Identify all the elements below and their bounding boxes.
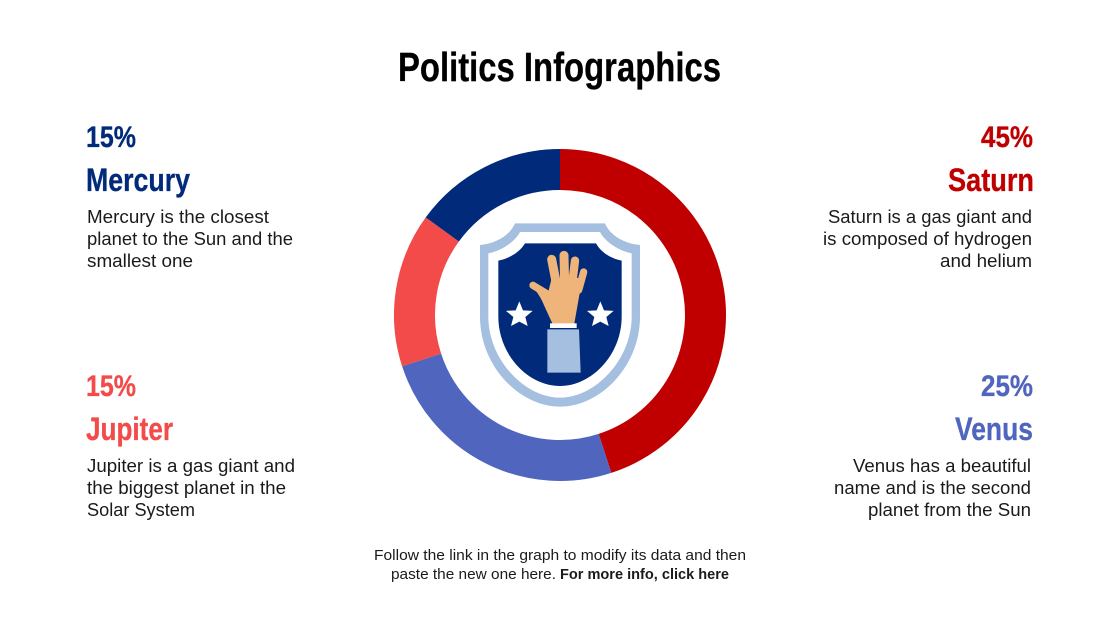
Venus description: name and is the second	[834, 478, 1031, 498]
Saturn description: and helium	[940, 251, 1032, 271]
Venus heading: Venus	[955, 411, 1033, 447]
donut chart	[415, 170, 706, 461]
footer note: Follow the link in the graph to modify its data and then	[374, 548, 746, 564]
panel: Venus	[834, 370, 1033, 520]
footer note	[374, 548, 746, 583]
Mercury description	[87, 207, 293, 271]
icon: shield with raised hand	[480, 223, 640, 407]
Jupiter description: Solar System	[87, 500, 195, 520]
Venus description	[834, 456, 1031, 520]
Saturn description	[823, 207, 1032, 271]
title: Politics Infographics	[398, 44, 721, 90]
Jupiter description	[87, 456, 295, 520]
Mercury description: planet to the Sun and the	[87, 229, 293, 249]
icon: right star	[587, 301, 614, 326]
footer note: For more info, click here	[560, 567, 729, 583]
icon: hand	[533, 255, 584, 323]
Mercury description: Mercury is the closest	[87, 207, 269, 227]
icon: cuff	[550, 323, 577, 328]
panel: Jupiter	[86, 370, 295, 520]
icon: sleeve	[547, 329, 581, 373]
Jupiter heading: Jupiter	[86, 411, 173, 447]
Saturn description: is composed of hydrogen	[823, 229, 1032, 249]
Mercury percentage: 15%	[86, 121, 136, 154]
Saturn heading: Saturn	[948, 162, 1034, 198]
panel: Saturn	[823, 121, 1034, 271]
Jupiter description: the biggest planet in the	[87, 478, 286, 498]
Venus percentage: 25%	[981, 370, 1033, 403]
Mercury heading: Mercury	[86, 162, 190, 198]
Jupiter description: Jupiter is a gas giant and	[87, 456, 295, 476]
Mercury description: smallest one	[87, 251, 193, 271]
Saturn percentage: 45%	[981, 121, 1033, 154]
Venus description: Venus has a beautiful	[853, 456, 1031, 476]
footer note: paste the new one here.	[391, 567, 556, 583]
Jupiter percentage: 15%	[86, 370, 136, 403]
Venus description: planet from the Sun	[868, 500, 1031, 520]
icon: left star	[506, 301, 533, 326]
panel: Mercury	[86, 121, 293, 271]
Saturn description: Saturn is a gas giant and	[828, 207, 1032, 227]
